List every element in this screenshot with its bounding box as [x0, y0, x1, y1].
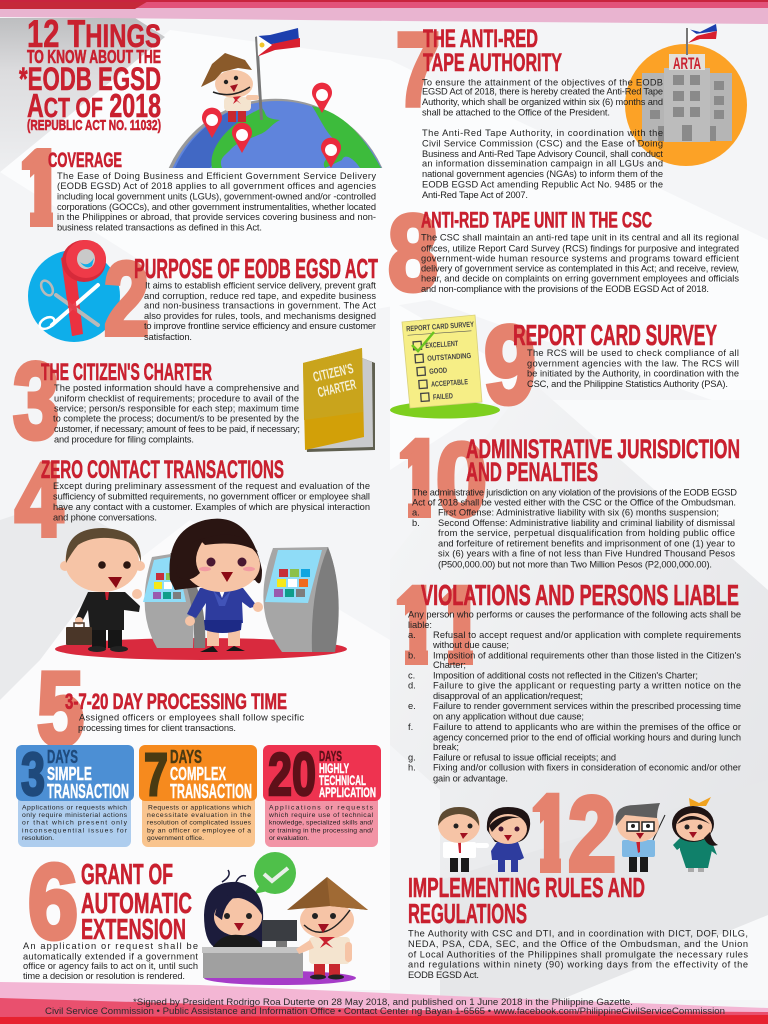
card: 7 days: [139, 741, 257, 847]
heading: 3-7-20 DAY PROCESSING TIME: [65, 689, 287, 714]
body text: and procedure for filing complaints.: [54, 434, 194, 444]
body text: satisfaction.: [144, 332, 192, 342]
body text: It aims to establish efficient service delivery, prevent graft: [145, 280, 376, 290]
body text: [412, 488, 737, 569]
body text: break;: [433, 742, 459, 752]
clerk: [204, 870, 263, 947]
body text: and non-business transactions in government. The Act: [144, 300, 376, 310]
section 6: automatic extension: [23, 843, 198, 981]
illustration: citizens at kiosks: [55, 519, 347, 660]
body text: a.: [408, 630, 416, 640]
woman in green with bow: [672, 797, 718, 872]
body text: EODB EGSD Act amending Republic Act No. 9485 or the: [422, 179, 663, 189]
body text: [422, 78, 663, 200]
body text: six (6) years with a fine of not less than Five Hundred Thousand Pesos: [438, 548, 735, 558]
body text: processing times for client transactions.: [78, 723, 236, 733]
section 9: report card survey: [484, 304, 739, 427]
body text: a.: [412, 508, 420, 518]
body text: [408, 929, 748, 980]
map pin: [312, 83, 332, 113]
number 11: [396, 584, 473, 665]
body text: d.: [408, 681, 416, 691]
body text: an information dissemination campaign in all LGUs and: [422, 159, 663, 169]
title: TO KNOW ABOUT THE: [27, 47, 161, 67]
boy: [201, 53, 259, 122]
body text: to complete the process; document/s to be presented by the: [53, 414, 299, 424]
body text: and corruption, reduce red tape, and expedite business: [144, 291, 376, 301]
card: 20 days: [263, 741, 381, 847]
card: 7 days: necessitate evaluation in the: [147, 812, 251, 819]
icon: citizen's charter book: [303, 348, 375, 452]
title: *EODB EGSD: [19, 61, 161, 97]
card: 7 days: resolution of complicated issues: [147, 820, 252, 826]
body text: Business and Anti-Red Tape Advisory Council, shall conduct: [422, 149, 663, 159]
body text: hear, and decide on complaints on erring government employees and officials: [421, 274, 739, 284]
number 2: 2: [104, 242, 149, 358]
footer note: [45, 997, 725, 1016]
pole: [255, 36, 263, 120]
section 7: anti-red tape authority: [396, 12, 747, 200]
body text: The administrative jurisdiction on any violation of the provisions of the EODB EGSD: [412, 488, 737, 498]
body text: gain or advantage.: [433, 773, 508, 783]
top banner: [0, 0, 768, 24]
kiosk left: [143, 553, 205, 648]
icon: report card survey: OUTSTANDING: [427, 351, 472, 363]
icon: report card survey: GOOD: [429, 366, 448, 376]
body text: Imposition of additional requirements other than those listed in the Citizen's: [433, 650, 741, 660]
card: 20 days: Applications or requests: [269, 804, 374, 812]
body text: government-wide human resource systems and programs toward efficient: [421, 254, 739, 264]
flag: [688, 24, 717, 43]
card: 3 days: TRANSACTION: [47, 781, 129, 803]
body text: Failure or refusal to issue official receipts; and: [433, 752, 616, 762]
number 3: 3: [13, 340, 59, 461]
section 4: zero contact: [15, 442, 370, 558]
body text: EODB EGSD Act.: [408, 970, 479, 980]
card: 20 days: HIGHLY: [319, 760, 349, 776]
body text: including local government units (LGUs), government-owned and/or -controlled: [57, 192, 376, 202]
section 10: administrative jurisdiction: [400, 438, 740, 570]
heading: COVERAGE: [48, 149, 122, 172]
heading: ZERO CONTACT TRANSACTIONS: [41, 456, 284, 484]
body text: and forfeiture of retirement benefits and imprisonment of one (1) year to: [438, 538, 735, 548]
body text: (P500,000.00) but not more than Two Million Pesos (P2,000,000.00).: [438, 559, 712, 569]
card: 20 days: which require use of technical: [268, 812, 373, 819]
body text: automatically extended if a government: [23, 952, 198, 962]
body text: [53, 481, 370, 523]
speech bubble with check: [254, 852, 296, 894]
title: ACT OF 2018: [27, 87, 161, 124]
body text: Imposition of additional costs not reflected in the Citizen's Charter;: [433, 670, 698, 680]
monitor: [262, 920, 297, 949]
woman in blue suit: [487, 807, 530, 872]
heading: [466, 434, 740, 487]
body text: To ensure the attainment of the objectives of the EODB: [422, 78, 663, 88]
body text: The Authority with CSC and DTI, and in coordination with DICT, DOF, DILG,: [408, 929, 748, 939]
body text: e.: [408, 701, 416, 711]
body text: First Offense: Administrative liability with six (6) months suspension;: [438, 508, 719, 518]
body text: (EODB EGSD) Act of 2018 applies to all government offices and agencies: [57, 181, 376, 191]
body text: and non-compliance with the provisions of the EODB EGSD Act of 2018.: [421, 284, 709, 294]
card: 20 days: knowledge, specialized skills and/: [269, 820, 373, 826]
body text: government agencies with the law. The RCS will: [527, 358, 739, 368]
number 10: [400, 438, 486, 519]
icon: citizen's charter book: CITIZEN'S: [311, 360, 355, 385]
heading: AUTOMATIC: [81, 888, 192, 920]
body text: h.: [408, 763, 416, 773]
body text: Fixing and/or collusion with fixers in consideration of economic and/or other: [433, 763, 741, 773]
body text: without due cause;: [432, 640, 509, 650]
body text: Failure to give the applicant or requesting party a written notice on the: [433, 681, 741, 691]
footer note: Civil Service Commission • Public Assistance and Information Office • Contact Center ng Bayan 1-6565 • www.facebook.com/PhilippineCivilServiceCommission: [45, 1006, 725, 1016]
body text: [78, 712, 304, 733]
section 1: coverage: [22, 148, 376, 230]
card: 3 days: only require ministerial actions: [22, 812, 128, 819]
body text: b.: [412, 518, 420, 528]
card: 20 days: TECHNICAL: [319, 772, 366, 788]
desk: [202, 947, 303, 978]
card: 7 days: COMPLEX: [170, 764, 226, 784]
body text: Authority, which shall be organized within six (6) months and: [422, 97, 663, 107]
body text: The posted information should have a comprehensive and: [54, 383, 299, 393]
card: 3 days: SIMPLE: [47, 764, 92, 784]
heading: THE CITIZEN'S CHARTER: [41, 359, 212, 386]
body text: The Anti-Red Tape Authority, in coordination with the: [422, 128, 663, 138]
card: 3 days: [16, 741, 134, 847]
body text: b.: [408, 650, 416, 660]
card: 3 days: or that which present only: [22, 820, 128, 826]
heading: EXTENSION: [81, 914, 186, 946]
body text: Charter;: [433, 660, 466, 670]
man with glasses and pointer: [615, 803, 665, 872]
body text: corporations (GOCCs), and other government instrumentalities, whether located: [57, 202, 376, 212]
number 7: 7: [396, 12, 440, 128]
number 12: 2: [568, 776, 616, 894]
body text: business related transactions as defined in this Act.: [57, 222, 262, 232]
tape roll: [62, 240, 106, 282]
body text: on any application without due cause;: [433, 711, 584, 721]
body text: time a decision or resolution is rendered.: [23, 971, 185, 981]
body text: Anti-Red Tape Act of 2007.: [422, 190, 528, 200]
number 11: 1: [439, 566, 481, 691]
woman in blue suit: [169, 519, 263, 652]
title: (REPUBLIC ACT NO. 11032): [27, 117, 161, 134]
icon: ARTA building: [625, 24, 747, 166]
number 11: 1: [395, 566, 437, 691]
body text: CSC, and the Philippine Statistics Authority (PSA).: [527, 379, 728, 389]
illustration: four officers: [438, 797, 718, 872]
body text: agency concerned prior to the end of official working hours and during lunch: [433, 732, 741, 742]
body text: to improve frontline service efficiency and ensure customer: [144, 321, 376, 331]
icon: report card survey: [390, 315, 500, 418]
map pin: [321, 138, 341, 168]
body text: c.: [408, 670, 415, 680]
card: 7 days: government office.: [147, 835, 204, 842]
body text: [144, 280, 376, 342]
card: 3 days: inconsequential issues for: [22, 828, 128, 834]
body text: f.: [408, 722, 413, 732]
scissors: [38, 279, 98, 331]
icon: report card survey: EXCELLENT: [425, 339, 459, 350]
body text: offices, utilize Report Card Survey (RCS) findings for purposive and integrated: [421, 243, 739, 253]
body text: also provides for rules, tools, and mechanisms designed: [144, 311, 376, 321]
body text: The Ease of Doing Business and Efficient Government Service Delivery: [57, 171, 376, 181]
heading: TAPE AUTHORITY: [423, 49, 562, 77]
section 3: citizen's charter: [13, 340, 300, 461]
card: 20 days: or training in the processing and/: [269, 828, 373, 834]
man in white shirt: [438, 807, 489, 872]
body text: office or agency fails to act on it, until such: [23, 961, 198, 971]
section 2: purpose: [104, 242, 378, 358]
body text: [421, 233, 739, 294]
heading: [81, 859, 192, 946]
body text: from the service, perpetual disqualification from holding public office: [438, 528, 735, 538]
heading: THE ANTI-RED: [423, 25, 538, 53]
body text: and phone conversations.: [53, 513, 157, 523]
body text: Civil Service Commission (CSC) and the Ease of Doing: [422, 139, 663, 149]
card: 3 days: resolution.: [22, 835, 54, 842]
card: 7 days: Requests or applications which: [148, 804, 251, 812]
section 2 icon: tape and scissors: [28, 240, 120, 342]
body text: and regulations within ninety (90) working days from the effectivity of the: [408, 960, 748, 970]
icon: report card survey: FAILED: [433, 391, 454, 402]
icon: report card survey: REPORT CARD SURVEY: [406, 320, 474, 333]
citizen with salakot hat: [287, 877, 368, 980]
section 5: processing time: [37, 652, 304, 768]
bottom banner: [0, 982, 768, 1024]
heading: PURPOSE OF EODB EGSD ACT: [134, 253, 378, 284]
heading: ANTI-RED TAPE UNIT IN THE CSC: [421, 208, 652, 232]
body text: Failure to attend to applicants who are within the premises of the office or: [433, 722, 741, 732]
number 12: [532, 792, 615, 873]
body text: of Local Authorities of the Philippines shall promulgate the necessary rules: [408, 949, 748, 959]
heading: AND PENALTIES: [466, 457, 598, 487]
card: 3 days: DAYS: [47, 747, 78, 767]
body text: Act of 2018 shall be vested either with the CSC or the Office of the Ombudsman.: [412, 497, 736, 507]
body text: EGSD Act of 2018, there is hereby created the Anti-Red Tape: [422, 87, 663, 97]
man in black suit: [60, 528, 145, 652]
card: 7 days: 7: [144, 741, 168, 808]
flag: [257, 28, 300, 56]
body text: [57, 171, 376, 232]
body text: [408, 610, 741, 783]
body text: An application or request shall be: [23, 941, 198, 951]
card: 7 days: TRANSACTION: [170, 781, 252, 803]
icon: report card survey: ACCEPTABLE: [431, 377, 468, 389]
body text: national government agencies (NGAs) to inform them of the: [422, 169, 663, 179]
body text: Refusal to accept request and/or application with complete requirements: [433, 630, 741, 640]
kiosk right: [263, 547, 339, 652]
number 4: 4: [15, 442, 63, 558]
number 5: 5: [37, 652, 84, 768]
body text: have any contact with a customer. Examples of which are physical interaction: [53, 502, 370, 512]
globe illustration with boy and flag: [168, 28, 382, 168]
body text: liable:: [408, 620, 432, 630]
title: [19, 13, 161, 134]
body text: [23, 941, 198, 981]
heading: [423, 25, 562, 77]
ARTA sign: ARTA: [673, 54, 701, 73]
section 11: violations: [395, 566, 741, 783]
body text: shall be attached to the Office of the President.: [422, 108, 610, 118]
map pin: [232, 123, 252, 153]
body text: customer, if necessary; amount of fees to be paid, if necessary;: [54, 424, 300, 434]
body text: [527, 348, 739, 389]
body text: disapproval of an application/request;: [433, 691, 583, 701]
body text: in the Philippines or abroad, that provide services covering business and non-: [57, 212, 376, 222]
card: 20 days: APPLICATION: [319, 784, 376, 800]
body text: Except during preliminary assessment of the request and evaluation of the: [53, 481, 370, 491]
heading: [408, 872, 645, 929]
body text: service; person/s responsible for each step; maximum time: [54, 404, 299, 414]
body text: The RCS will be used to check compliance of all: [527, 348, 739, 358]
title: 12 THINGS: [27, 13, 161, 56]
body text: g.: [408, 752, 416, 762]
card: 20 days: DAYS: [319, 748, 342, 765]
number 10: 1: [398, 419, 440, 544]
number 10: 0: [436, 422, 487, 538]
body text: NEDA, PSA, CDA, SEC, and the Office of the Ombudsman, and the Union: [408, 939, 748, 949]
body text: uniform checklist of requirements; procedure to avail of the: [54, 394, 299, 404]
number 12: 1: [531, 774, 569, 899]
body text: The CSC shall maintain an anti-red tape unit in its central and all its regional: [421, 233, 739, 243]
section 8: anti-red tape unit: [388, 192, 739, 313]
number 1: 1: [20, 128, 62, 253]
section 12: implementing rules: [408, 792, 748, 978]
number 6: 6: [28, 843, 78, 961]
number 8: 8: [388, 192, 438, 313]
body text: sufficiency of submitted requirements, no government officer or employee shall: [53, 492, 370, 502]
map pin: [202, 108, 222, 138]
card: 20 days: or evaluation.: [269, 835, 309, 842]
card: 20 days: 20: [268, 741, 316, 808]
body text: Failure to render government services within the prescribed processing time: [433, 701, 741, 711]
card: 3 days: Applications or requests which: [22, 804, 127, 812]
footer note: *Signed by President Rodrigo Roa Duterte on 28 May 2018, and published on 1 June 2018 in the Philippine Gazette.: [133, 997, 633, 1007]
illustration: clerk and citizen at desk: [202, 852, 368, 985]
card: 7 days: by an officer or employee of a: [147, 828, 251, 834]
heading: REGULATIONS: [408, 898, 527, 929]
body text: Any person who performs or causes the performance of the following acts shall be: [408, 610, 741, 620]
body text: Assigned officers or employees shall follow specific: [79, 712, 304, 722]
body text: delivery of government service as contemplated in this Act; and receive, review,: [421, 263, 739, 273]
body text: be initiated by the Authority, in coordination with the: [527, 369, 739, 379]
card: 3 days: 3: [21, 741, 45, 808]
body text: [53, 383, 300, 444]
number 9: 9: [484, 304, 536, 427]
icon: citizen's charter book: CHARTER: [316, 376, 358, 400]
heading: GRANT OF: [81, 859, 173, 891]
body text: Second Offense: Administrative liability and criminal liability of dismissal: [438, 518, 735, 528]
card: 7 days: DAYS: [170, 747, 202, 767]
